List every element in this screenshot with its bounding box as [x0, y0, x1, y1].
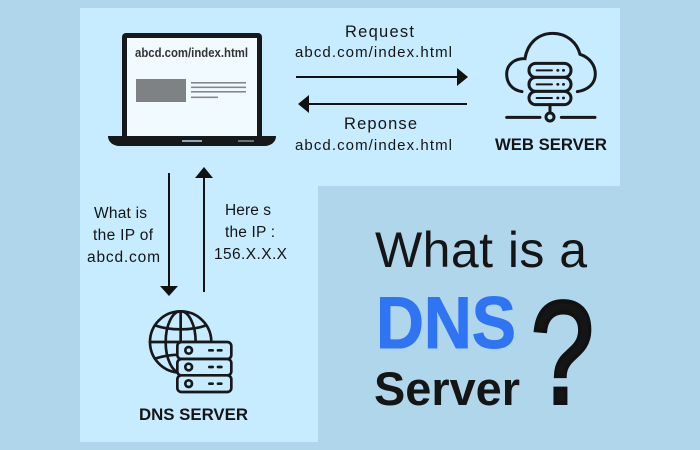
query text: the IP of — [93, 227, 154, 244]
icon: laptop — [108, 33, 276, 146]
reply text: Here s — [225, 202, 271, 219]
label: web server: WEB SERVER — [495, 135, 607, 154]
label: dns server: DNS SERVER — [139, 405, 248, 424]
reply text: the IP : — [225, 224, 275, 241]
title: DNS — [376, 283, 516, 364]
request label: abcd.com/index.html — [295, 44, 452, 61]
panel: L-shaped diagram area — [80, 8, 620, 442]
response label: Reponse — [344, 115, 417, 133]
reply text: 156.X.X.X — [214, 246, 288, 263]
request label: Request — [345, 23, 414, 41]
title: Server — [374, 362, 520, 415]
title — [374, 222, 594, 434]
icon: laptop: abcd.com/index.html — [135, 46, 248, 60]
response label — [295, 115, 452, 154]
arrow: request — [296, 68, 468, 86]
reply text — [214, 202, 288, 263]
arrow: reply from dns — [195, 167, 213, 292]
request label — [295, 23, 452, 61]
icon: dns server — [150, 311, 231, 392]
response label: abcd.com/index.html — [295, 137, 452, 154]
arrow: response — [298, 95, 467, 113]
title: What is a — [375, 222, 587, 278]
icon: web server — [507, 33, 595, 121]
query text: What is — [94, 205, 147, 222]
query text: abcd.com — [87, 249, 160, 266]
arrow: query to dns — [160, 173, 178, 296]
title: ? — [531, 270, 594, 434]
query text — [87, 205, 160, 266]
